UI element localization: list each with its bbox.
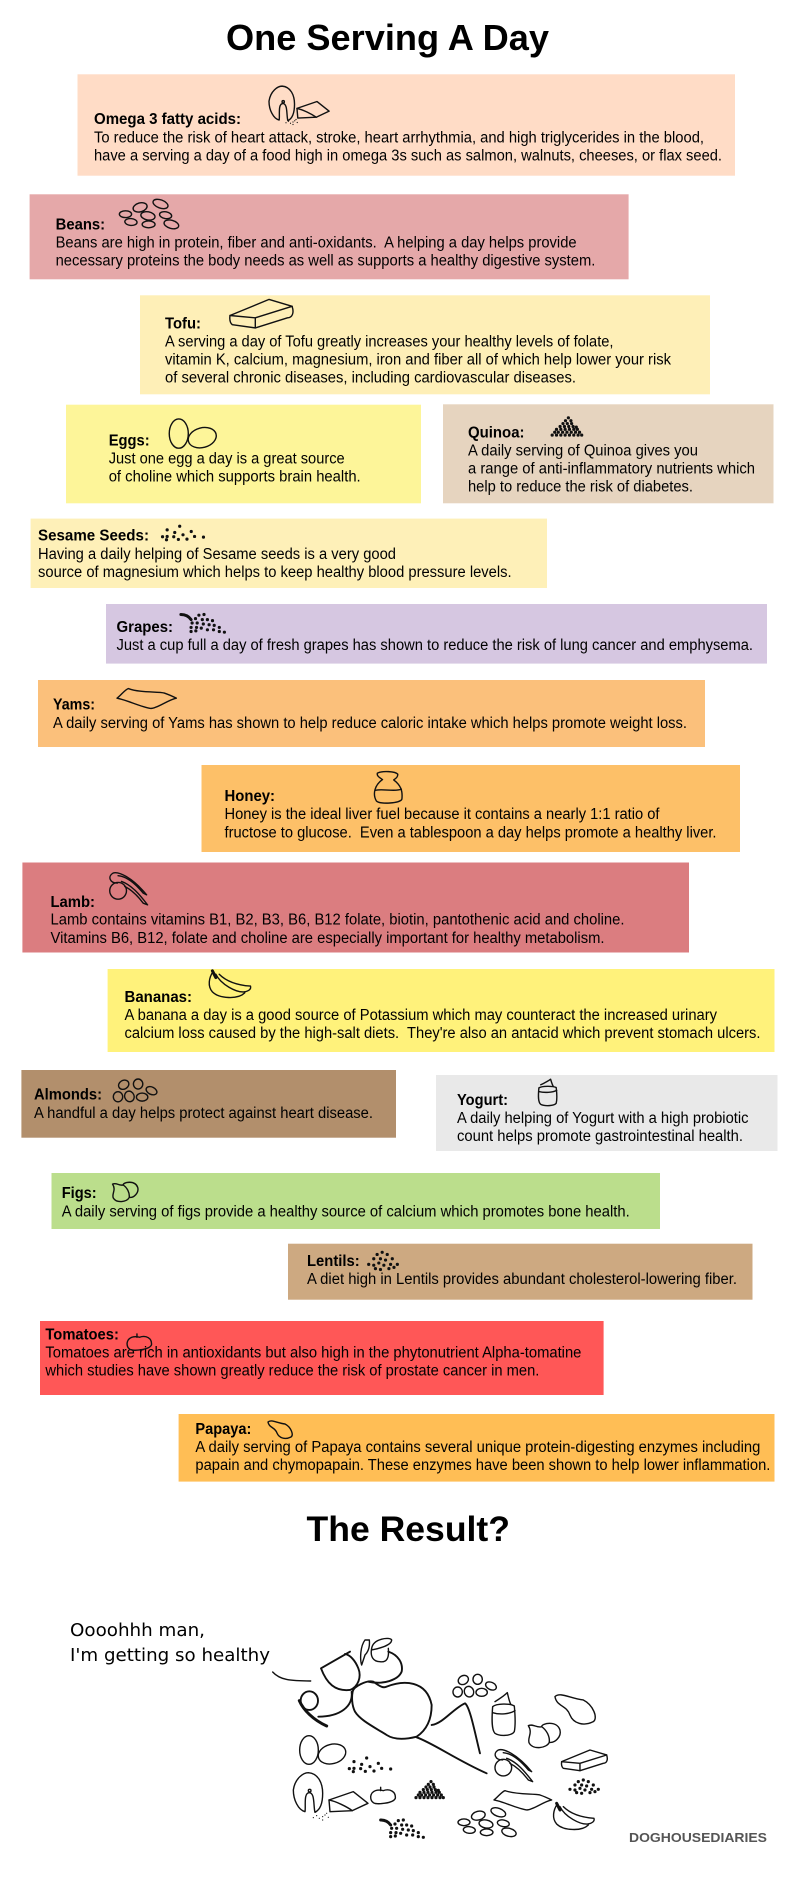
text: eggs: Just one egg a day is a great source <box>109 451 345 468</box>
text: tomatoes: which studies have shown greatly reduce the risk of prostate cancer in men. <box>44 1363 539 1380</box>
text: papaya: papain and chymopapain. These enzymes have been shown to help lower inflammation. <box>195 1457 770 1474</box>
heading: figs: Figs: <box>62 1185 97 1202</box>
text: quinoa: A daily serving of Quinoa gives you <box>468 443 698 460</box>
text: bananas: calcium loss caused by the high-salt diets. They're also an antacid which prevent stomach ulcers. <box>124 1025 760 1042</box>
heading: lentils: Lentils: <box>307 1253 360 1270</box>
heading: grapes: Grapes: <box>116 619 173 636</box>
heading: bananas: Bananas: <box>124 989 192 1006</box>
honey and bite on head <box>361 1638 392 1665</box>
text: sesame seeds <box>38 546 512 581</box>
icon: sesame seeds <box>163 526 203 540</box>
icon: lentils <box>369 1252 397 1270</box>
panel: papaya <box>179 1414 775 1482</box>
icon: grapes <box>181 614 224 632</box>
text: honey <box>224 806 716 842</box>
heading: sesame seeds: Sesame Seeds: <box>38 528 149 545</box>
panel: quinoa <box>443 404 774 503</box>
panel: yogurt <box>436 1075 778 1151</box>
text: bananas <box>124 1007 760 1042</box>
icon: beans <box>119 197 180 230</box>
icon: yam <box>117 689 176 708</box>
heading: yogurt: Yogurt: <box>457 1092 508 1109</box>
icon: tofu <box>230 299 293 328</box>
text: yogurt <box>457 1110 749 1145</box>
text: quinoa <box>468 443 755 496</box>
text: tofu: of several chronic diseases, including cardiovascular diseases. <box>165 370 576 387</box>
heading: quinoa: Quinoa: <box>468 424 524 441</box>
text: grapes: Just a cup full a day of fresh grapes has shown to reduce the risk of lung cancer and emphysema. <box>116 637 753 654</box>
text: figs: A daily serving of figs provide a healthy source of calcium which promotes bone health. <box>62 1204 630 1221</box>
text: lamb: Vitamins B6, B12, folate and choline are especially important for healthy metabolism. <box>50 930 604 947</box>
icon: fig <box>113 1182 138 1202</box>
text: sesame seeds: source of magnesium which helps to keep healthy blood pressure levels. <box>38 564 512 581</box>
panel: tofu <box>140 295 710 394</box>
heading: the result: The Result? <box>306 1510 510 1549</box>
icon: tomato <box>127 1334 152 1350</box>
credit: DOGHOUSEDIARIES <box>629 1830 767 1845</box>
panel: tomatoes <box>40 1321 604 1395</box>
icon: lamb <box>110 873 148 905</box>
text: beans <box>56 235 595 270</box>
panel: sesame seeds <box>31 519 547 588</box>
text: lentils: A diet high in Lentils provides abundant cholesterol-lowering fiber. <box>307 1271 737 1288</box>
text: almonds: A handful a day helps protect against heart disease. <box>34 1105 373 1122</box>
figure <box>299 1652 487 1773</box>
text: honey: Honey is the ideal liver fuel because it contains a nearly 1:1 ratio of <box>224 806 660 823</box>
text: omega 3: have a serving a day of a food high in omega 3s such as salmon, walnuts, cheeses, or flax seed. <box>94 148 722 165</box>
panel: eggs <box>66 405 421 503</box>
icon: salmon, cheese and flax <box>269 86 329 124</box>
heading: almonds: Almonds: <box>34 1087 102 1104</box>
icon: papaya <box>268 1421 292 1438</box>
text: yogurt: count helps promote gastrointestinal health. <box>457 1128 743 1145</box>
panel: grapes <box>106 604 767 664</box>
text: yogurt: A daily helping of Yogurt with a high probiotic <box>457 1110 749 1127</box>
text: papaya <box>195 1439 770 1474</box>
heading: eggs: Eggs: <box>109 433 150 450</box>
text: omega 3: To reduce the risk of heart attack, stroke, heart arrhythmia, and high triglycerides in the blood, <box>94 130 704 147</box>
text: lamb <box>50 912 624 947</box>
speech text: I'm getting so healthy <box>70 1645 270 1666</box>
text: eggs <box>109 451 361 486</box>
text: lamb: Lamb contains vitamins B1, B2, B3, B6, B12 folate, biotin, pantothenic acid and choline. <box>50 912 624 929</box>
panel: bananas <box>108 969 775 1052</box>
heading: omega 3: Omega 3 fatty acids: <box>94 111 241 128</box>
heading: honey: Honey: <box>224 788 275 805</box>
text: omega 3 <box>94 130 722 165</box>
text: beans: Beans are high in protein, fiber and anti-oxidants. A helping a day helps provide <box>56 235 577 252</box>
heading: beans: Beans: <box>56 216 105 233</box>
text: quinoa: help to reduce the risk of diabetes. <box>468 479 693 496</box>
icon: eggs <box>169 419 219 451</box>
text: tomatoes <box>44 1345 581 1380</box>
text: tofu <box>165 334 671 387</box>
text: sesame seeds: Having a daily helping of Sesame seeds is a very good <box>38 546 396 563</box>
heading: lamb: Lamb: <box>50 894 95 911</box>
text: quinoa: a range of anti-inflammatory nutrients which <box>468 461 755 478</box>
icon: quinoa <box>552 418 582 435</box>
text: beans: necessary proteins the body needs as well as supports a healthy digestive system. <box>56 253 595 270</box>
title: One Serving A Day <box>226 17 549 58</box>
panel: almonds <box>21 1070 396 1138</box>
foods <box>293 1674 607 1838</box>
text: eggs: of choline which supports brain health. <box>109 469 361 486</box>
heading: tomatoes: Tomatoes: <box>45 1327 119 1344</box>
text: yams: A daily serving of Yams has shown to help reduce caloric intake which helps promote weight loss. <box>53 715 687 732</box>
heading: yams: Yams: <box>53 697 95 714</box>
panel: yams <box>38 680 705 747</box>
icon: honey jar <box>374 772 402 803</box>
panel: lamb <box>22 862 689 952</box>
icon: yogurt <box>538 1079 557 1106</box>
heading: tofu: Tofu: <box>165 315 201 332</box>
text: tofu: A serving a day of Tofu greatly increases your healthy levels of folate, <box>165 334 614 351</box>
speech text <box>70 1620 270 1666</box>
text: tomatoes: Tomatoes are rich in antioxidants but also high in the phytonutrient Alpha-tomatine <box>45 1345 581 1362</box>
heading: papaya: Papaya: <box>195 1421 251 1438</box>
text: papaya: A daily serving of Papaya contains several unique protein-digesting enzymes including <box>195 1439 760 1456</box>
speech tail <box>273 1672 311 1681</box>
illustration: person lying among foods <box>273 1638 607 1838</box>
panel: omega 3 <box>78 74 735 176</box>
panel: lentils <box>288 1244 752 1300</box>
speech text: Oooohhh man, <box>70 1620 205 1641</box>
text: bananas: A banana a day is a good source of Potassium which may counteract the increased urinary <box>124 1007 717 1024</box>
text: honey: fructose to glucose. Even a tablespoon a day helps promote a healthy liver. <box>224 824 716 842</box>
panel: figs <box>52 1173 660 1229</box>
panel: beans <box>30 194 629 279</box>
text: tofu: vitamin K, calcium, magnesium, iron and fiber all of which help lower your risk <box>165 352 671 369</box>
panel: honey <box>202 765 740 852</box>
icon: almonds <box>113 1078 158 1103</box>
icon: bananas <box>209 971 251 998</box>
